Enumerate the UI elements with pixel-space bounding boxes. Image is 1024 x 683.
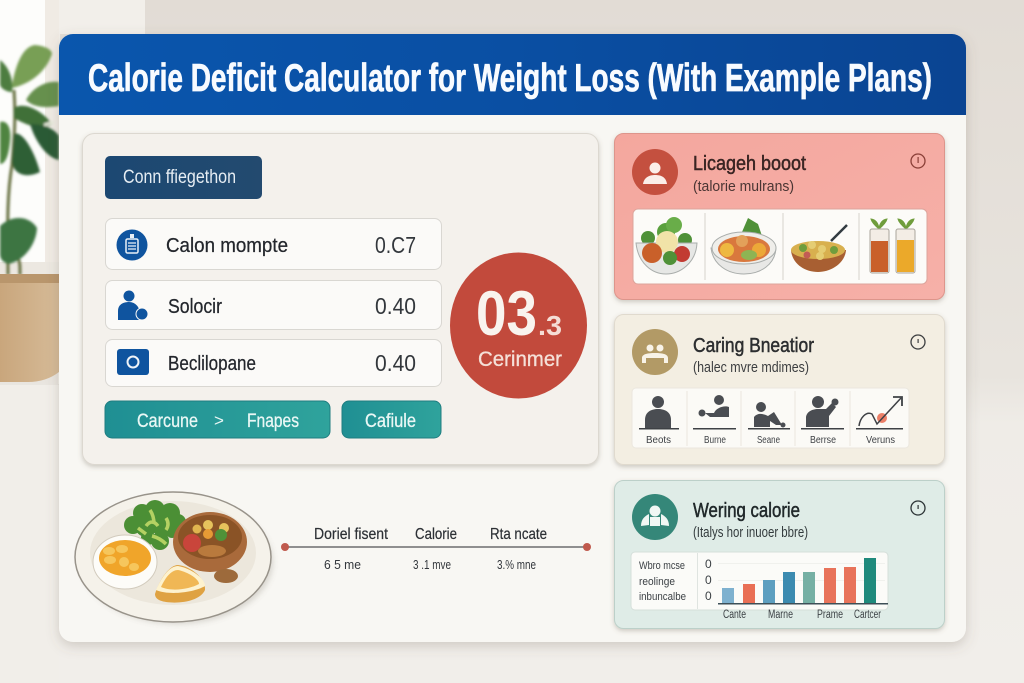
chart axis values: 0 xyxy=(705,573,712,587)
chart x labels xyxy=(723,609,881,621)
chart legend text xyxy=(639,560,686,603)
timeline: Doriel fisent xyxy=(314,526,389,543)
button: calculate xyxy=(105,401,330,438)
panel: wering calorie xyxy=(614,480,944,628)
juices xyxy=(870,219,915,273)
salad bowl xyxy=(636,217,697,274)
input row: calorie xyxy=(106,218,442,270)
chart axis values: 0 xyxy=(705,589,712,603)
noodle bowl xyxy=(711,218,776,274)
configuration button: Conn ffiegethon xyxy=(123,167,236,188)
nut xyxy=(214,569,238,583)
bread xyxy=(155,565,205,603)
activity 5: trend arrow: Veruns xyxy=(866,435,895,446)
result circle: Cerinmer xyxy=(478,348,562,371)
chart legend text: reolinge xyxy=(639,576,675,588)
potted plant xyxy=(0,45,59,275)
icon: person on green circle xyxy=(632,494,678,540)
activity 2 xyxy=(693,395,736,446)
button: calculate: Fnapes xyxy=(247,411,299,432)
input row: solocir xyxy=(106,280,442,330)
activity 3 xyxy=(748,402,790,446)
caring subheading: (halec mvre mdimes) xyxy=(693,360,809,376)
greens xyxy=(124,500,186,550)
orange bowl xyxy=(93,535,157,589)
button: cafiule xyxy=(342,401,441,438)
activity 1 xyxy=(639,396,679,446)
icon: info xyxy=(911,154,925,168)
plate of food xyxy=(75,492,273,624)
activity 1: Beots xyxy=(646,435,671,446)
input row: beclilopane: 0.40 xyxy=(375,350,416,376)
icon: person xyxy=(118,290,148,320)
timeline: 3 .1 mve xyxy=(413,557,451,572)
icon: people on tan circle xyxy=(632,329,678,375)
caring heading: Caring Bneatior xyxy=(693,334,814,357)
icon: info xyxy=(911,335,925,349)
input row: solocir: Solocir xyxy=(168,296,222,318)
chart legend text: Wbro mcse xyxy=(639,560,685,572)
icon: bottle xyxy=(116,230,148,260)
result circle: .3 xyxy=(538,310,562,341)
panel: caring behaviour xyxy=(614,314,944,464)
button: cafiule: Cafiule xyxy=(365,411,416,432)
chart xyxy=(631,552,888,621)
chart x labels: Cartcer xyxy=(854,609,881,621)
button: calculate: > xyxy=(214,411,224,430)
configuration button xyxy=(105,156,262,199)
activity 5: trend arrow xyxy=(856,397,903,446)
timeline: 6 5 me xyxy=(324,557,361,572)
panel: calculator xyxy=(82,134,598,464)
input row: calorie: Calon mompte xyxy=(166,235,288,257)
main card xyxy=(59,34,966,642)
timeline: 3.% mne xyxy=(497,557,536,572)
result circle: 03 xyxy=(476,279,537,349)
timeline: Rta ncate xyxy=(490,526,547,543)
bars xyxy=(722,558,876,603)
input row: beclilopane: Beclilopane xyxy=(168,353,256,375)
chart x labels: Marne xyxy=(768,609,793,621)
result circle xyxy=(450,252,587,398)
wering subheading: (Italys hor inuoer bbre) xyxy=(693,525,808,541)
food strip xyxy=(633,209,927,284)
icon: info xyxy=(911,501,925,515)
chart legend text: inbuncalbe xyxy=(639,591,686,603)
chart axis values xyxy=(705,557,712,603)
chart x labels: Prame xyxy=(817,609,843,621)
chart x labels: Cante xyxy=(723,609,746,621)
plant pot xyxy=(0,274,59,382)
timeline xyxy=(281,526,591,572)
activity 4 xyxy=(801,396,844,446)
bowl of stew xyxy=(173,512,247,572)
meals subheading: (talorie mulrans) xyxy=(693,179,794,195)
input row: calorie: 0.C7 xyxy=(375,232,416,258)
activity strip xyxy=(632,388,909,448)
meals heading: Licageh booot xyxy=(693,152,806,175)
icon: square xyxy=(117,349,149,375)
panel: meals xyxy=(614,134,944,300)
header bar xyxy=(59,34,966,115)
input row: solocir: 0.40 xyxy=(375,293,416,319)
icon: person on red circle xyxy=(632,149,678,195)
activity 4: Berrse xyxy=(810,435,836,446)
button: calculate: Carcune xyxy=(137,411,198,432)
timeline: Calorie xyxy=(415,526,457,543)
wering heading: Wering calorie xyxy=(693,499,800,522)
input row: beclilopane xyxy=(106,340,442,386)
stew bowl with spoon xyxy=(791,225,847,272)
chart axis values: 0 xyxy=(705,557,712,571)
activity 3: Seane xyxy=(757,435,780,446)
activity 2: Burne xyxy=(704,435,726,446)
